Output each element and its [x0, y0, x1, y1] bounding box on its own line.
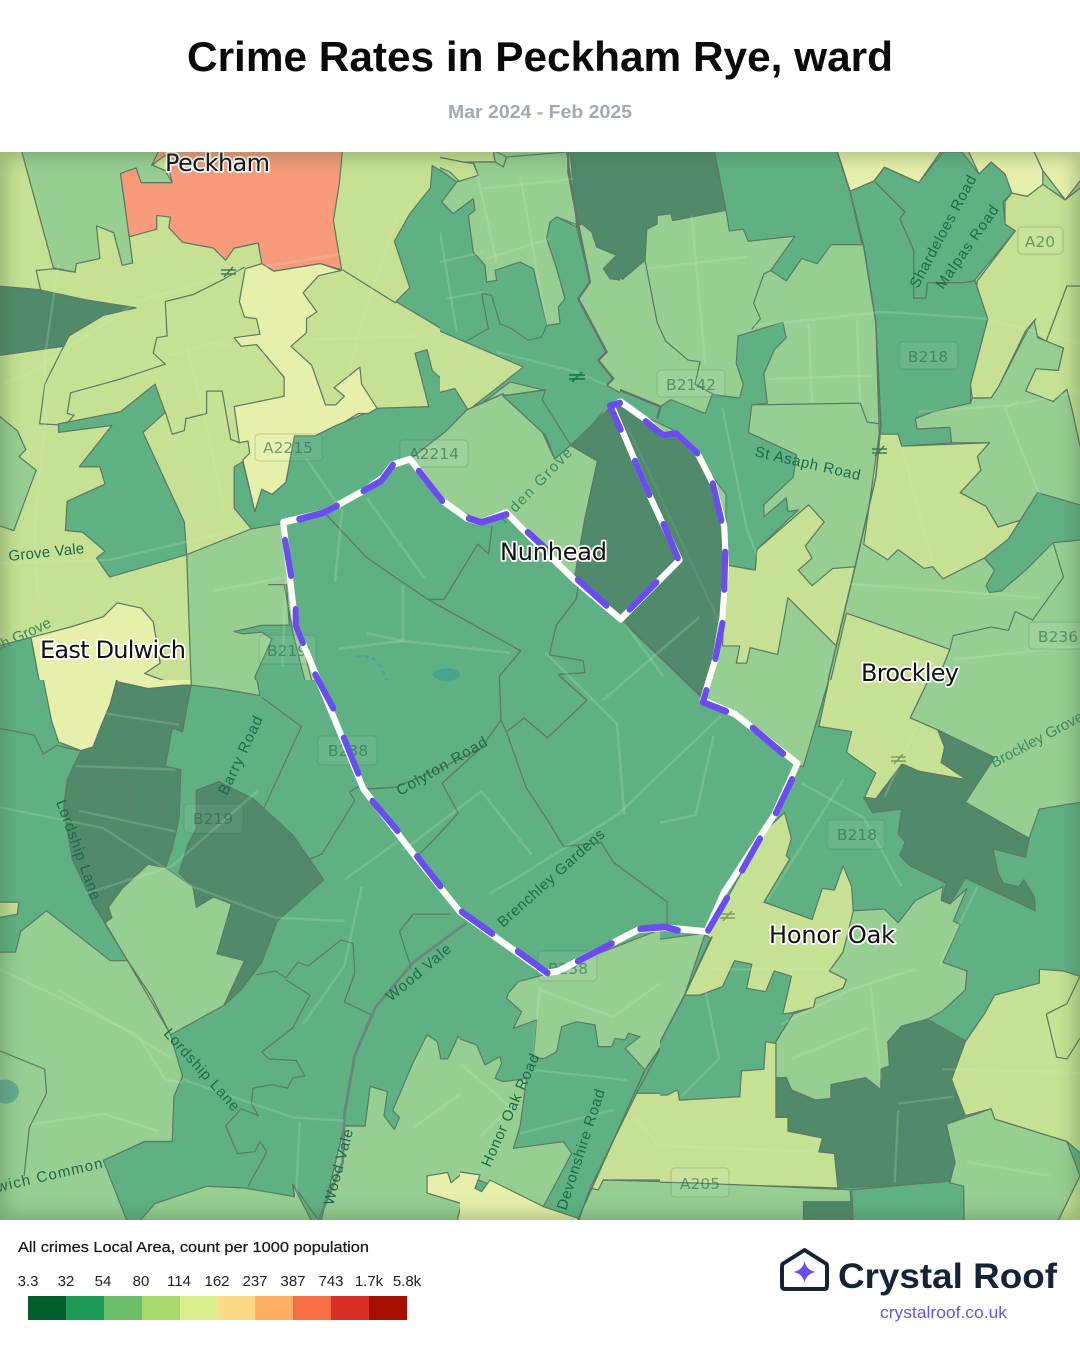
stream — [356, 656, 387, 681]
sign: B238 south — [538, 951, 597, 981]
sign: A205 — [671, 1168, 729, 1197]
road: Wood Vale south: Wood Vale — [320, 1127, 357, 1207]
sign: A20 — [1018, 227, 1063, 254]
legend tick labels: 1.7k — [355, 1273, 384, 1290]
place: Honor Oak: Honor Oak — [769, 921, 895, 949]
road: Grove Vale: Grove Vale — [8, 540, 85, 565]
legend tick labels: 387 — [280, 1273, 306, 1290]
ward boundary: purple dashes — [285, 403, 792, 973]
park roads — [306, 427, 721, 894]
place: Peckham: Peckham — [165, 149, 270, 177]
legend tick labels: 3.3 — [18, 1273, 38, 1290]
map area: north-west — [0, 152, 464, 680]
ward interior: Peckham Rye and Nunhead — [283, 390, 797, 973]
road: Linden Grove: inden Grove — [496, 444, 576, 527]
legend tick labels — [18, 1273, 422, 1290]
sign: A2214: A2214 — [409, 445, 459, 463]
pond — [433, 668, 460, 681]
road number signs — [184, 227, 1080, 1197]
legend tick labels: 743 — [318, 1273, 344, 1290]
legend tick labels: 114 — [167, 1273, 191, 1290]
place: East Dulwich: East Dulwich — [40, 636, 186, 664]
sign: B219 south: B219 — [193, 810, 233, 828]
rail icon — [720, 911, 735, 921]
legend tick labels: 32 — [58, 1273, 74, 1290]
road: Barry Road: Barry Road — [215, 713, 267, 798]
brand logo — [782, 1250, 1057, 1322]
legend tick labels: 162 — [204, 1273, 230, 1290]
road: Devonshire Road: Devonshire Road — [554, 1087, 609, 1212]
sign: A205: A205 — [680, 1175, 720, 1193]
ward boundary — [283, 402, 797, 973]
ward boundary: white line — [283, 402, 797, 973]
road: Honor Oak Road: Honor Oak Road — [478, 1051, 543, 1170]
website: crystalroof.co.uk — [880, 1304, 1008, 1322]
title: Crime Rates in Peckham Rye, ward — [187, 33, 893, 80]
road: Lordship Lane north: Lordship Lane — [52, 798, 104, 902]
road: Lordship Lane south: Lordship Lane — [160, 1025, 243, 1115]
sign: B2142 — [657, 370, 725, 397]
road names — [0, 173, 1080, 1212]
sign: A20: A20 — [1025, 233, 1055, 251]
rail icon — [221, 267, 236, 277]
place labels — [40, 149, 959, 949]
place: Nunhead: Nunhead — [500, 538, 607, 566]
map detail: neighbourhoods around Devonshire Road — [458, 928, 663, 1222]
sign: B218 south: B218 — [837, 826, 877, 844]
sign: B2142: B2142 — [666, 376, 716, 394]
legend tick labels: 54 — [95, 1273, 111, 1290]
icon: house with star — [782, 1250, 827, 1289]
map area: north-east — [537, 147, 1080, 701]
road: Colyton Road: Colyton Road — [394, 734, 490, 799]
sign: B219 south — [184, 804, 243, 833]
sign: B219 north: B219 — [267, 642, 307, 660]
dark neighbourhood in notch — [571, 410, 680, 619]
rail icon — [891, 754, 906, 764]
sign: A2215 — [255, 434, 322, 461]
sign: B238 south: B238 — [548, 960, 588, 978]
rail icon — [872, 446, 887, 456]
sign: B218 north: B218 — [908, 348, 948, 366]
subtitle: date range: Mar 2024 - Feb 2025 — [448, 102, 632, 122]
medium-green pocket north of Nunhead — [503, 390, 571, 459]
dark neighbourhood inside ward — [612, 402, 726, 696]
sign: B236 — [1029, 622, 1080, 649]
sign: B219 north — [259, 635, 316, 664]
map area: south-west — [0, 680, 480, 1220]
road: Wood Vale north: Wood Vale — [383, 941, 455, 1005]
road: Shardeloes Road: Shardeloes Road — [907, 173, 980, 291]
legend tick labels: 237 — [242, 1273, 268, 1290]
road: St Asaph Road: St Asaph Road — [753, 443, 862, 484]
sign: B238 west: B238 — [328, 742, 368, 760]
light-green neighbourhood beside ward — [410, 394, 597, 580]
legend tick labels: 80 — [133, 1273, 149, 1290]
sign: A2215: A2215 — [263, 439, 313, 457]
map area: south-east — [660, 680, 1080, 1220]
ward fill — [286, 463, 794, 838]
railway stations — [221, 267, 906, 921]
legend — [18, 1239, 422, 1320]
sign: A2214 — [400, 440, 468, 467]
legend tick labels: 5.8k — [393, 1273, 422, 1290]
sign: B236: B236 — [1038, 628, 1078, 646]
sign: B218 north — [899, 342, 958, 369]
brand name: Crystal Roof — [838, 1257, 1057, 1296]
legend heading: All crimes Local Area, count per 1000 population — [18, 1239, 369, 1256]
road: Malpas Road: Malpas Road — [932, 202, 1002, 292]
place: Brockley: Brockley — [861, 659, 959, 687]
legend colour bar — [28, 1296, 407, 1320]
ward internal boundaries — [326, 514, 701, 928]
sign: B238 west — [318, 736, 377, 765]
rail icon — [569, 372, 585, 382]
map detail: neighbourhoods north of Nunhead — [438, 150, 622, 415]
road: Brenchley Gardens: Brenchley Gardens — [494, 826, 608, 931]
sign: B218 south — [827, 820, 885, 849]
